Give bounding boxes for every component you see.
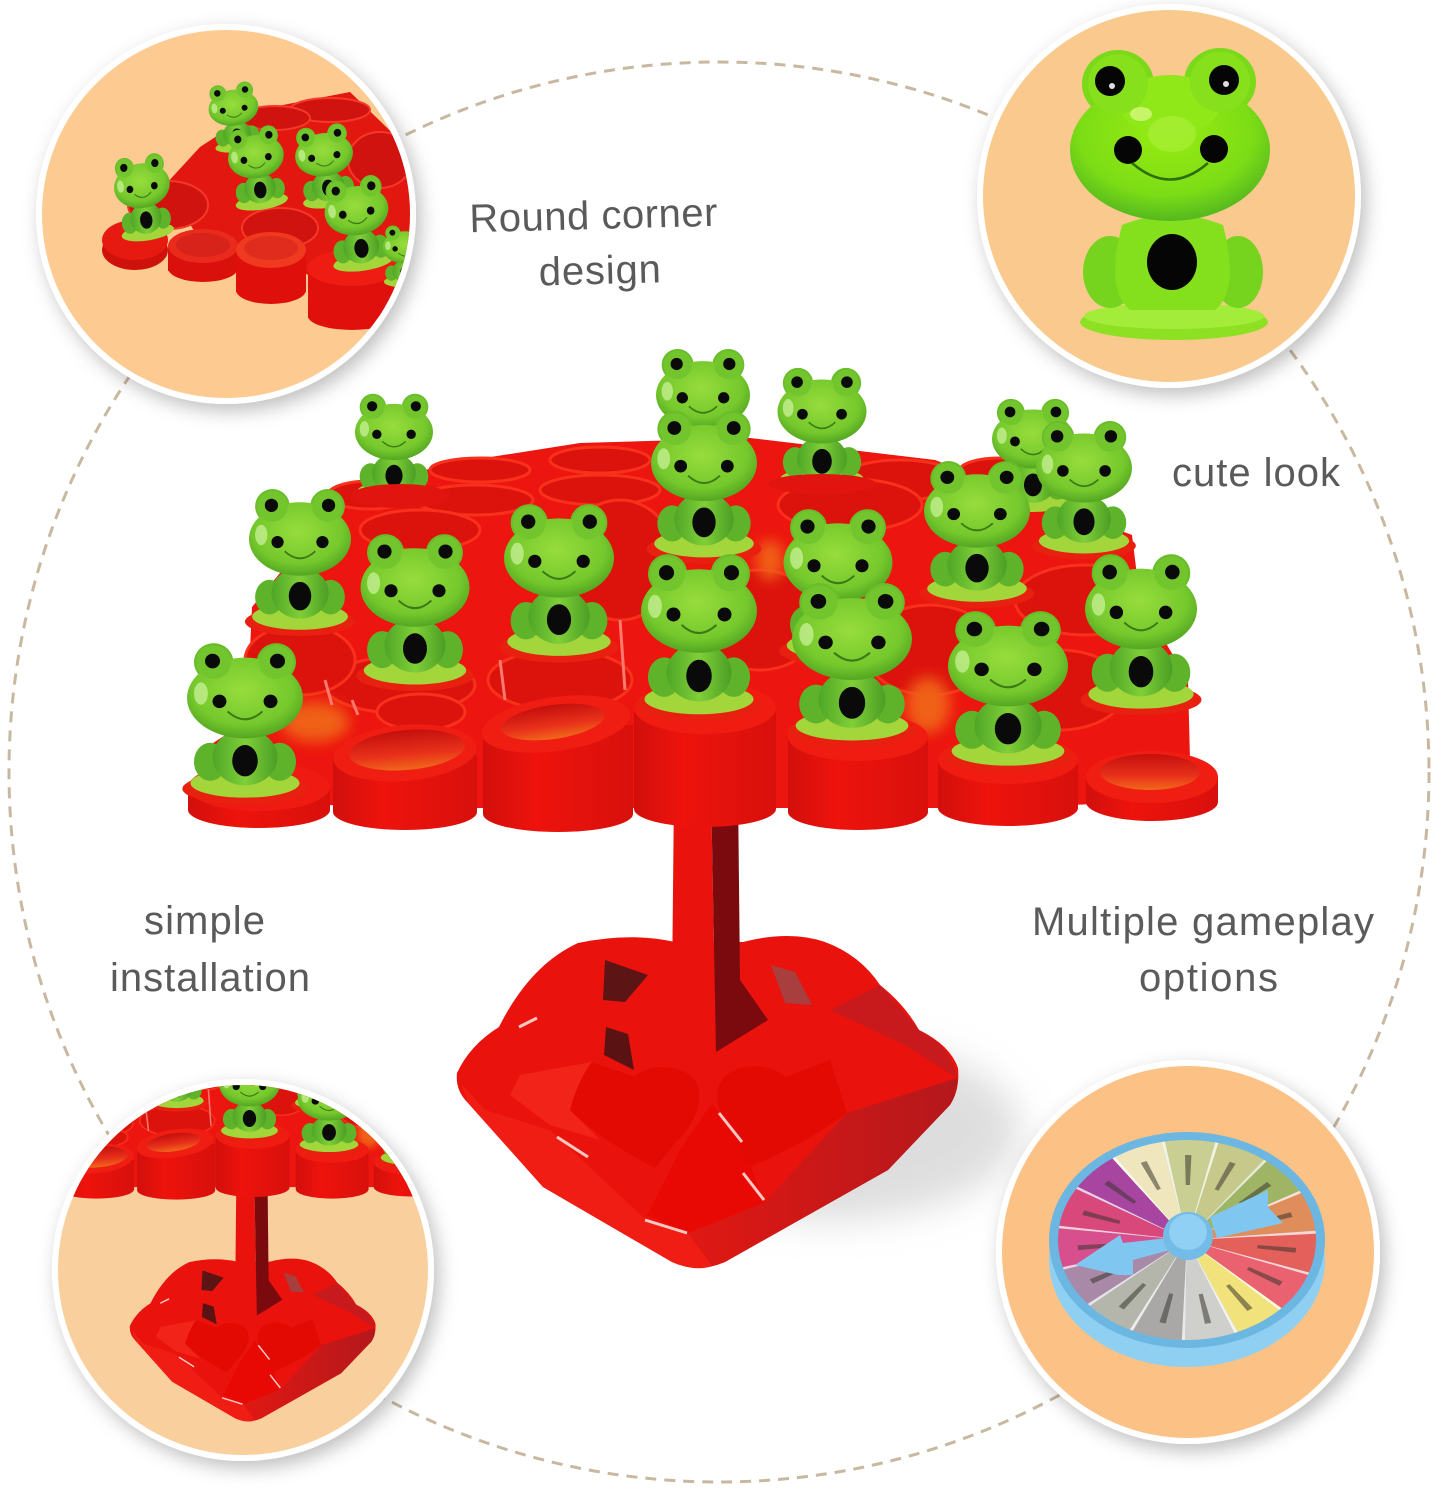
- panel: simple installation circle: [48, 1076, 448, 1478]
- panel: spinner circle: [996, 1060, 1380, 1444]
- panel: round corner detail circle: [36, 24, 428, 404]
- front row cups: [188, 682, 1218, 832]
- main toy: frog balance tree: [182, 349, 1218, 1268]
- label: round corner design: [469, 191, 719, 296]
- label: multiple gameplay options: [1032, 900, 1374, 1000]
- icon: game spinner wheel: [1049, 1132, 1325, 1367]
- label: round corner design: design: [538, 247, 661, 294]
- toy shadow: [640, 1040, 1020, 1220]
- label: round corner design: Round corner: [469, 191, 718, 241]
- icon: big frog: [1070, 48, 1270, 340]
- panel: big frog circle: [977, 4, 1361, 388]
- heart-shaped base and stem: [457, 790, 958, 1268]
- label: simple installation: [110, 899, 310, 1000]
- label: cute look: cute look: [1172, 451, 1341, 495]
- board surface: [205, 438, 1190, 808]
- label: simple installation: simple: [144, 899, 265, 943]
- sixteen green frogs: [182, 349, 1201, 804]
- red board with cups and frogs: [182, 349, 1218, 832]
- label: multiple gameplay options: Multiple gameplay: [1032, 900, 1374, 944]
- label: simple installation: installation: [110, 956, 310, 1000]
- label: multiple gameplay options: options: [1139, 956, 1278, 1000]
